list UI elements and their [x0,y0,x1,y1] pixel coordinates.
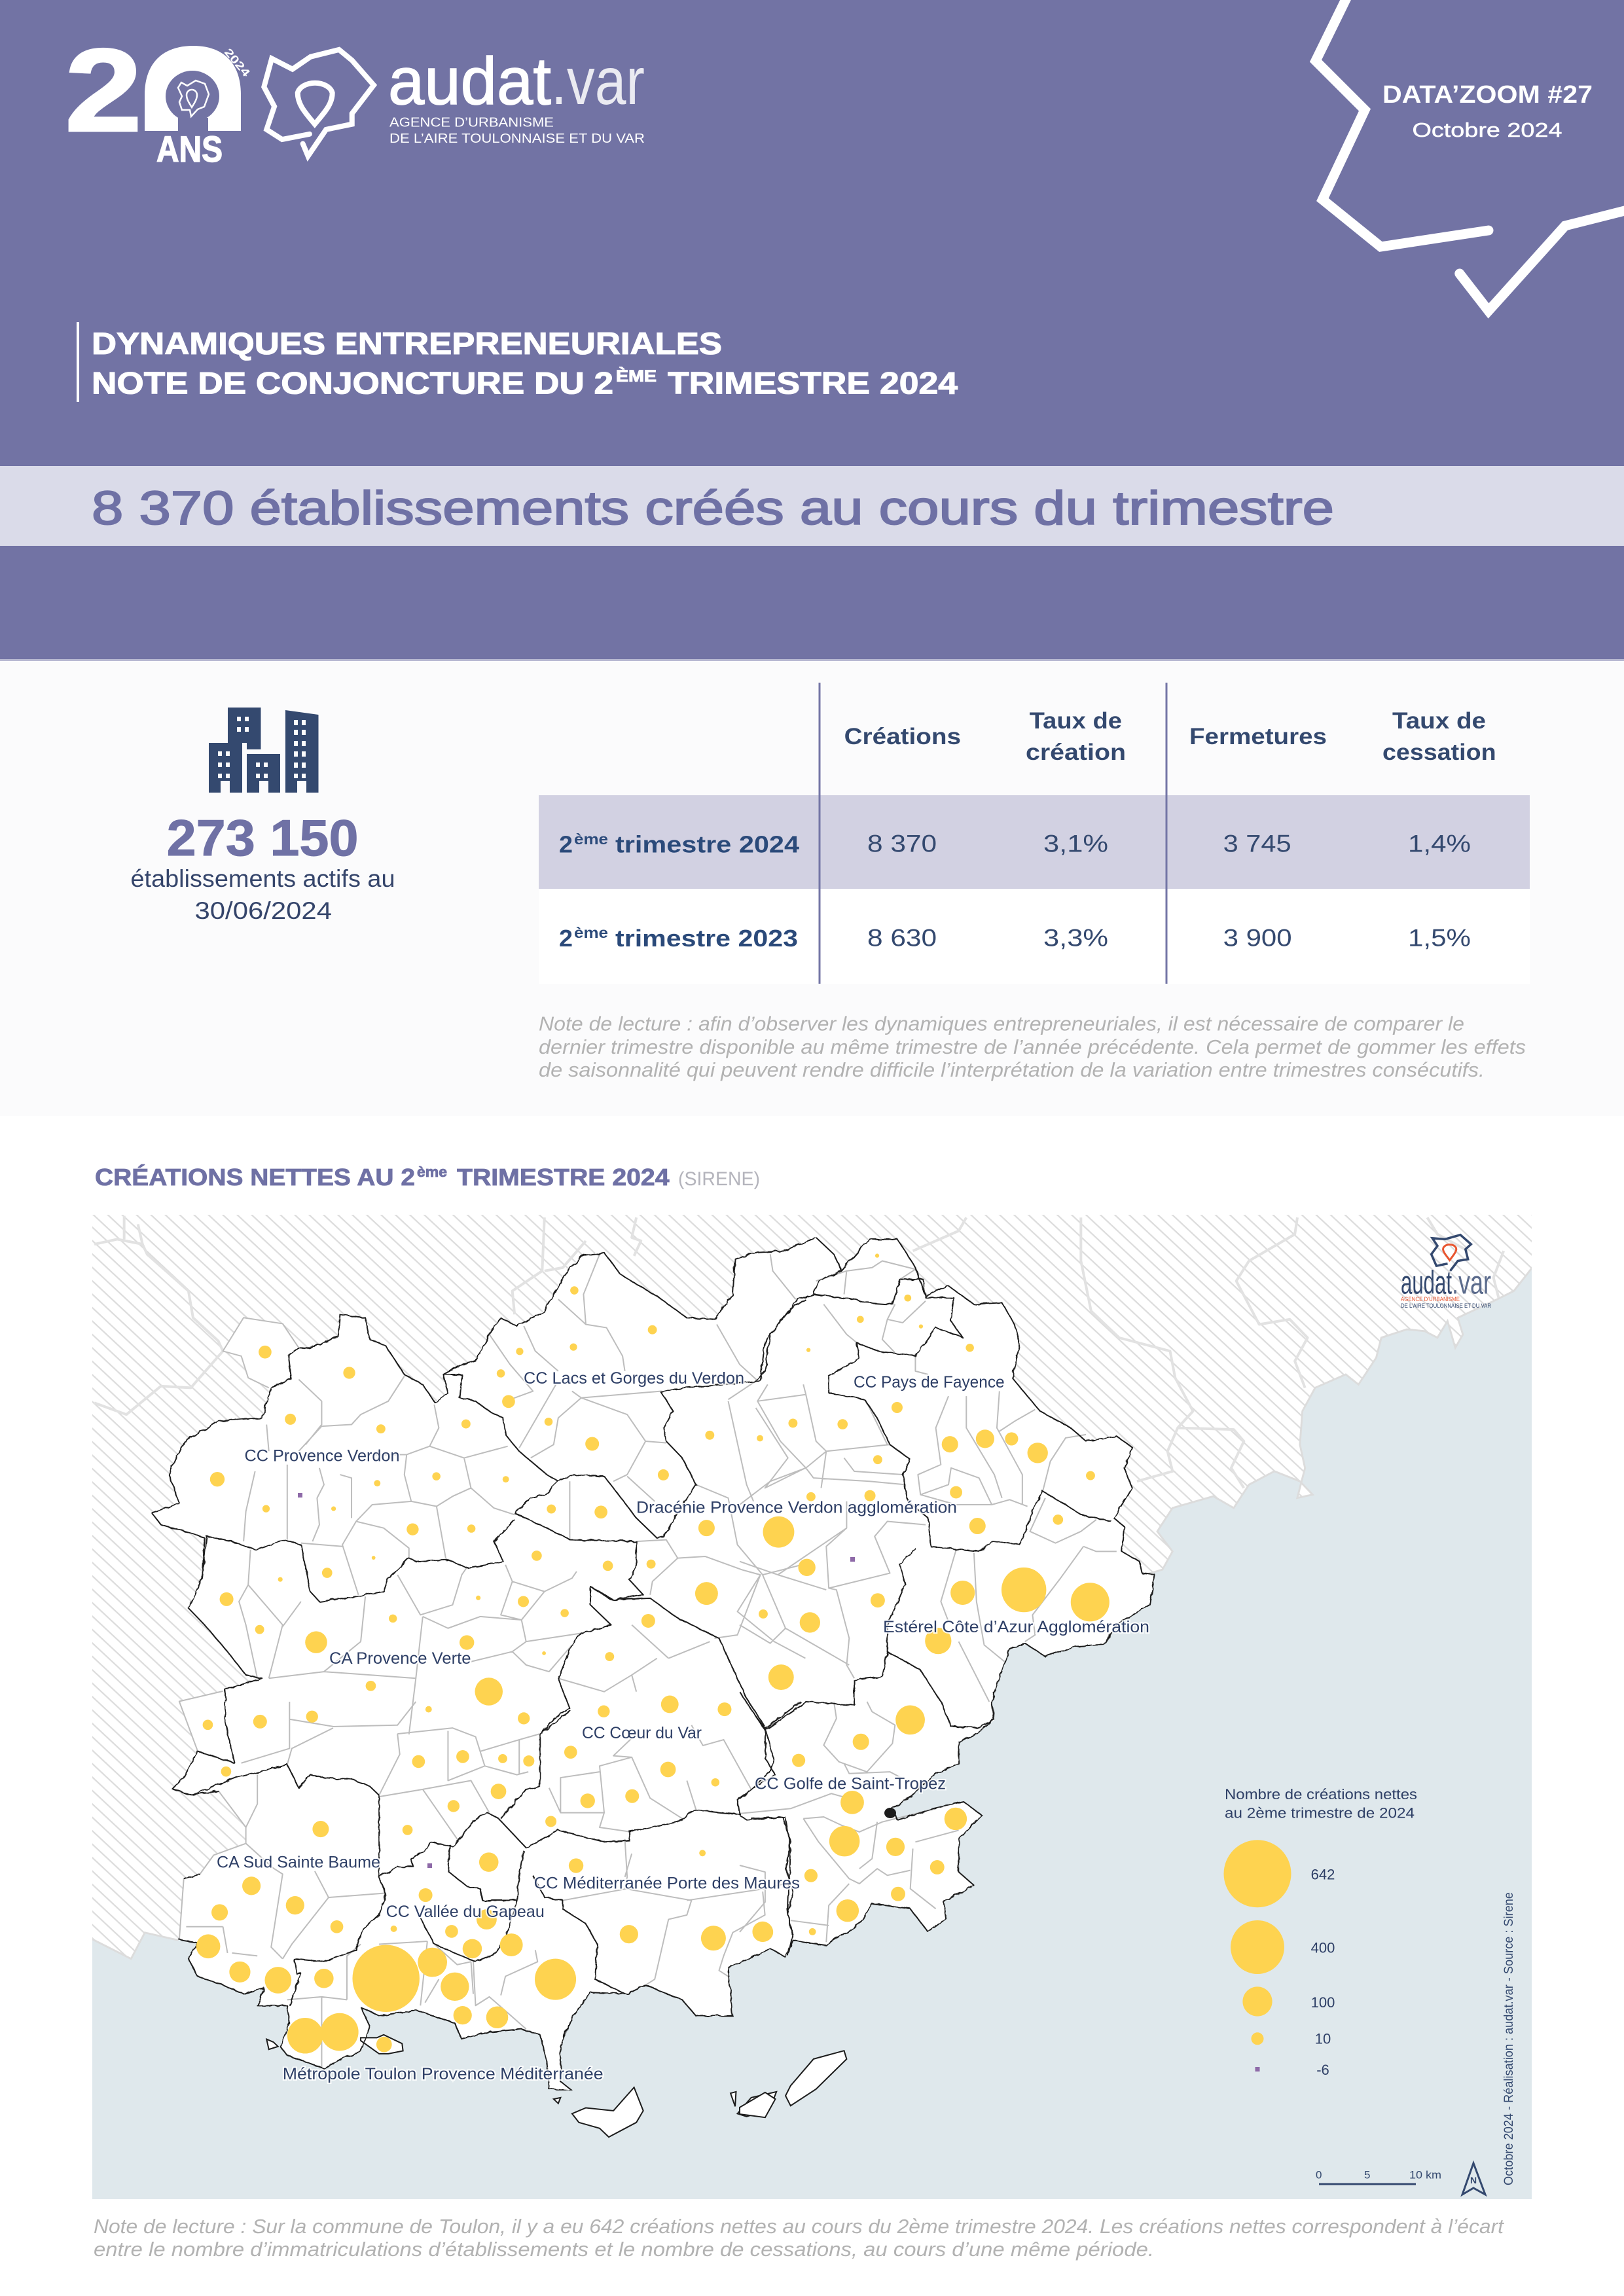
publication label: DATA’ZOOM #27 [1382,81,1593,109]
title block: DYNAMIQUES ENTREPRENEURIALES [92,326,722,361]
legend: 642 [1311,1866,1335,1882]
legend: -6 [1316,2062,1329,2078]
table header [844,708,1496,765]
title block: NOTE DE CONJONCTURE DU 2 [92,365,613,401]
legend: au 2ème trimestre de 2024 [1225,1805,1415,1821]
scale bar: 5 [1364,2169,1370,2181]
logo: audat.var wordmark: AGENCE D’URBANISME [389,115,554,130]
logo: 20 ans: 2 [65,25,142,156]
golfe de Saint-Tropez head [884,1808,896,1818]
intercommunal boundaries and coastline [152,1238,1155,2090]
note de lecture: table: de saisonnalité qui peuvent rendre difficile l’interprétation de la variation entre trimestres consécutifs. [539,1058,1485,1081]
map heading [95,1164,760,1191]
key figure: 273 150 [167,809,359,867]
islands [266,2035,846,2137]
legend: Nombre de créations nettes [1225,1786,1417,1803]
row: 2e trimestre 2024 [559,831,1471,858]
row: 2e trimestre 2023: 3,3% [1043,925,1108,952]
credit: Octobre 2024 - Réalisation : audat.var - Source : Sirene [1502,1892,1516,2185]
logo: 20 ans: 0 [145,24,241,155]
publication label [1382,81,1593,141]
panel: établissements actifs [131,708,395,924]
row: 2e trimestre 2024: trimestre 2024 [615,831,799,858]
row: 2e trimestre 2023: 3 900 [1223,925,1292,952]
row: 2e trimestre 2023 [559,924,1471,952]
map logo: audat [1401,1265,1452,1301]
legend: 400 [1311,1940,1335,1956]
note de lecture: table: dernier trimestre disponible au même trimestre de l’année précédente. Cela permet de gommer les effets [539,1035,1526,1058]
EPCI labels: CC Méditerranée Porte des Maures [534,1874,800,1893]
key figure caption [131,865,395,924]
decorative outline top right [1316,0,1624,311]
logo: audat.var wordmark [388,44,645,146]
legend: 10 [1315,2030,1331,2047]
logo: audat.var wordmark: audat [388,44,551,118]
map reading note [94,2215,1504,2261]
map heading: (SIRENE) [678,1168,760,1190]
neighbouring boundaries [94,1216,1504,1488]
note de lecture: table [539,1012,1526,1081]
EPCI labels: CC Pays de Fayence [854,1373,1005,1391]
row: 2e trimestre 2023: 8 630 [867,925,937,952]
EPCI labels: CC Golfe de Saint-Tropez [755,1775,946,1793]
row: 2e trimestre 2024: ème [574,831,608,848]
row: 2e trimestre 2024: 8 370 [867,831,937,857]
row: 2e trimestre 2024: 1,4% [1408,831,1471,857]
north arrow: N [1470,2175,1477,2185]
EPCI labels: CC Lacs et Gorges du Verdon [524,1369,744,1388]
scale bar: 0 [1316,2169,1322,2181]
legend: 100 [1311,1994,1335,2011]
headline band [0,466,1624,546]
north arrow [1462,2163,1485,2195]
EPCI labels: CA Provence Verte [329,1649,471,1668]
row: 2e trimestre 2024: 3,1% [1043,831,1108,857]
map reading note: entre le nombre d’immatriculations d’établissements et le nombre de cessations, au cours d’une même période. [94,2238,1154,2261]
EPCI labels: Métropole Toulon Provence Méditerranée [283,2065,604,2083]
map heading: ème [417,1164,447,1180]
commune boundaries [179,1254,1117,2067]
map logo: .var [1452,1265,1491,1301]
key figure caption: établissements actifs au [131,865,395,892]
EPCI labels: Estérel Côte d’Azur Agglomération [883,1618,1149,1636]
hatched neighbouring land [91,1214,1534,1959]
table: créations et fermetures [539,683,1530,984]
row: 2e trimestre 2023: 2 [559,925,573,952]
table header: Créations [844,724,961,749]
row: 2e trimestre 2024: 2 [559,831,573,858]
logo: 20 ans [65,24,253,170]
map heading: CRÉATIONS NETTES AU 2 [95,1164,415,1191]
EPCI labels: CC Vallée du Gapeau [386,1903,545,1921]
Var territory [152,1238,1155,2090]
proportional circles [196,1253,1110,2054]
map: créations nettes par commune [91,1214,1534,2199]
logo: audat.var mark [264,50,374,156]
EPCI labels: CC Provence Verdon [245,1447,399,1465]
table header: cessation [1382,740,1496,765]
table header: Taux de [1030,708,1122,734]
EPCI labels [217,1369,1149,2083]
map heading: TRIMESTRE 2024 [457,1164,669,1191]
title block: TRIMESTRE 2024 [668,365,958,401]
EPCI labels: Dracénie Provence Verdon agglomération [636,1499,957,1517]
map reading note: Note de lecture : Sur la commune de Toulon, il y a eu 642 créations nettes au cours du 2ème trimestre 2024. Les créations nettes correspondent à l’écart [94,2215,1504,2238]
map logo: AGENCE D’URBANISME [1401,1296,1460,1302]
icon: buildings [209,708,318,793]
logo: 20 ans: 2024 [222,46,253,79]
scale bar [1316,2170,1441,2185]
table header: Taux de [1392,708,1486,734]
logo: 20 ans: ANS [156,128,223,170]
row: 2e trimestre 2023: ème [574,924,608,941]
logo: audat.var wordmark: DE L’AIRE TOULONNAISE ET DU VAR [389,131,645,146]
header panel [0,0,1624,661]
scale bar: 10 km [1409,2169,1441,2181]
EPCI labels: CC Cœur du Var [582,1724,702,1742]
table header: création [1026,740,1126,765]
table header: Fermetures [1189,724,1327,749]
row: 2e trimestre 2023: trimestre 2023 [615,925,798,952]
publication label: Octobre 2024 [1413,118,1562,141]
negative value markers [298,1493,855,1868]
headline band: 8 370 établissements créés au cours du trimestre [92,482,1334,535]
logo: audat.var wordmark: .var [551,44,645,118]
row: 2e trimestre 2023: 1,5% [1408,925,1471,952]
EPCI labels: CA Sud Sainte Baume [217,1854,380,1872]
title block [77,322,958,402]
row: 2e trimestre 2024: 3 745 [1223,831,1291,857]
note de lecture: table: Note de lecture : afin d’observer les dynamiques entrepreneuriales, il est nécessaire de comparer le [539,1012,1464,1035]
key figure caption: 30/06/2024 [195,897,332,924]
legend [1224,1786,1417,2078]
map logo: DE L’AIRE TOULONNAISE ET DU VAR [1401,1302,1491,1309]
title block: ÈME [616,367,657,386]
map logo [1401,1235,1491,1309]
